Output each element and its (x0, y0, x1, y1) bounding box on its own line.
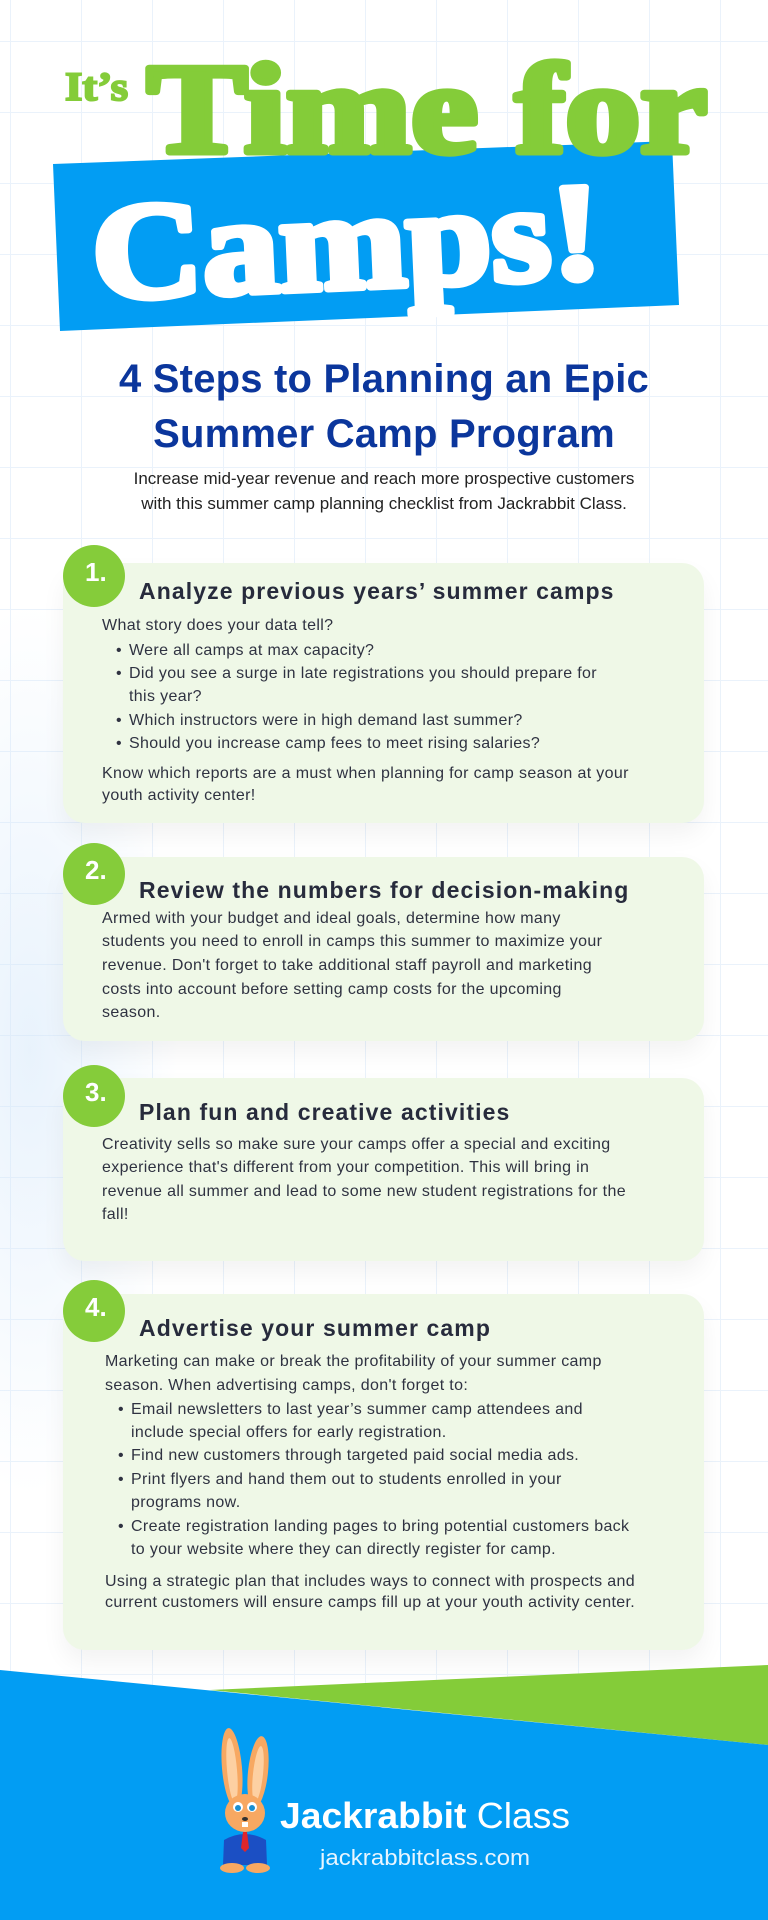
text: Using a strategic plan that includes ways to connect with prospects and (105, 1573, 635, 1590)
icon: number 1 (63, 545, 125, 607)
subtitle heading: Summer Camp Program (153, 412, 615, 456)
icon: rabbit mascot (219, 1727, 272, 1873)
text: this year? (129, 688, 202, 705)
text: Creativity sells so make sure your camps offer a special and exciting (102, 1136, 611, 1153)
heading 2: Review the numbers for decision-making (139, 877, 629, 903)
text: youth activity center! (102, 787, 256, 804)
text: What story does your data tell? (102, 617, 333, 634)
text: programs now. (131, 1494, 240, 1511)
text: Email newsletters to last year’s summer camp attendees and (131, 1401, 583, 1418)
text: Print flyers and hand them out to students enrolled in your (131, 1471, 562, 1488)
panel: step 1 (63, 545, 704, 829)
heading 3: Plan fun and creative activities (139, 1099, 510, 1125)
intro text: with this summer camp planning checklist from Jackrabbit Class. (141, 494, 627, 513)
text: It's: It’s (65, 64, 128, 109)
heading 1: Analyze previous years’ summer camps (139, 578, 615, 604)
text: fall! (102, 1206, 129, 1223)
heading 4: Advertise your summer camp (139, 1315, 491, 1341)
text: Were all camps at max capacity? (129, 642, 374, 659)
text: costs into account before setting camp costs for the upcoming (102, 981, 562, 998)
intro text: Increase mid-year revenue and reach more prospective customers (134, 469, 634, 488)
text: Create registration landing pages to bring potential customers back (131, 1518, 629, 1535)
subtitle heading (119, 357, 649, 456)
intro text (134, 469, 634, 513)
subtitle heading: 4 Steps to Planning an Epic (119, 357, 649, 401)
text: include special offers for early registration. (131, 1424, 447, 1441)
icon: number 3 (63, 1065, 125, 1127)
text: current customers will ensure camps fill up at your youth activity center. (105, 1594, 635, 1611)
text: to your website where they can directly register for camp. (131, 1541, 556, 1558)
text: Did you see a surge in late registrations you should prepare for (129, 665, 597, 682)
text: Know which reports are a must when planning for camp season at your (102, 765, 629, 782)
icon: number 4 (63, 1280, 125, 1342)
icon: number 3: 3. (85, 1077, 107, 1107)
text: Which instructors were in high demand last summer? (129, 712, 523, 729)
text: Armed with your budget and ideal goals, determine how many (102, 910, 561, 927)
text: Time for: Time for (147, 38, 707, 180)
text: revenue all summer and lead to some new student registrations for the (102, 1183, 626, 1200)
text: experience that's different from your competition. This will bring in (102, 1159, 589, 1176)
header title (53, 38, 708, 331)
blue banner (53, 141, 679, 331)
icon: number 2: 2. (85, 855, 107, 885)
brand name: Jackrabbit Class (280, 1795, 570, 1836)
text: Find new customers through targeted paid social media ads. (131, 1447, 579, 1464)
text: season. When advertising camps, don't forget to: (105, 1377, 468, 1394)
text: Camps!: Camps! (89, 154, 605, 329)
panel: step 2 (63, 843, 704, 1047)
footer (0, 1665, 768, 1920)
panel: step 3 (63, 1065, 704, 1267)
text: season. (102, 1004, 160, 1021)
blue band (0, 1670, 768, 1920)
panel: step 4 (63, 1280, 704, 1656)
icon: number 2 (63, 843, 125, 905)
icon: number 4: 4. (85, 1292, 107, 1322)
icon: number 1: 1. (85, 557, 107, 587)
text: Should you increase camp fees to meet rising salaries? (129, 735, 540, 752)
text: Marketing can make or break the profitability of your summer camp (105, 1353, 602, 1370)
green band (210, 1665, 768, 1745)
text: revenue. Don't forget to take additional staff payroll and marketing (102, 957, 592, 974)
text: students you need to enroll in camps this summer to maximize your (102, 933, 602, 950)
website url: jackrabbitclass.com (319, 1845, 530, 1870)
